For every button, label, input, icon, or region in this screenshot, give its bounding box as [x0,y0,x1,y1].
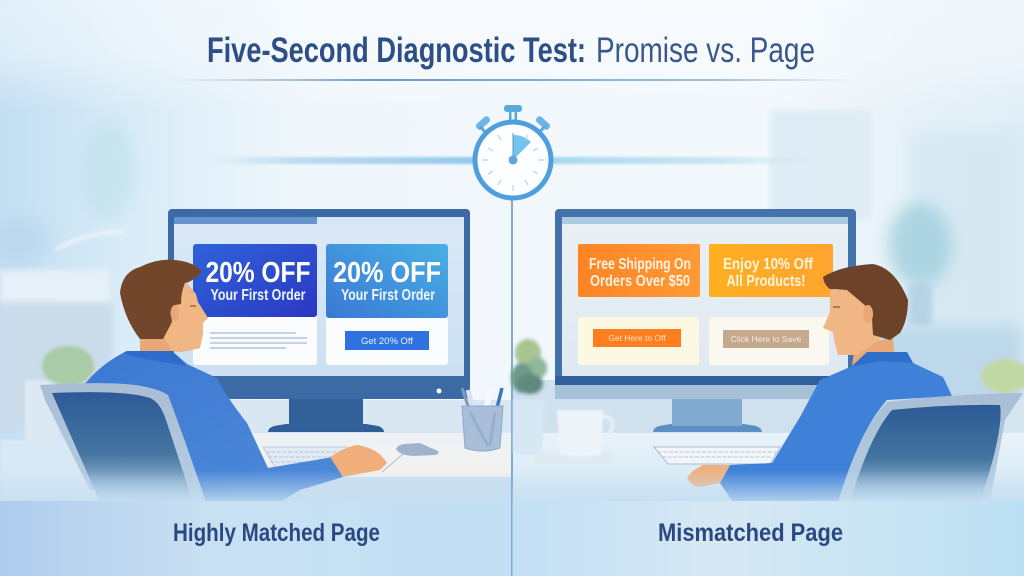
keyboard right [654,447,780,464]
card: free shipping [578,244,700,365]
desk items: pen cup [462,388,503,451]
card: blue offer: 20% OFF [206,257,310,289]
card: 10 percent off [709,244,833,365]
icon: stopwatch [475,105,551,198]
left chair [40,383,206,502]
bottom caption band [0,470,1024,576]
card: 10 percent off: All Products! [726,273,806,290]
hair [120,260,202,339]
neck [852,338,894,366]
title: Promise vs. Page [596,31,815,70]
center line over band [511,470,512,576]
shirt [84,351,343,502]
right person with chair [687,264,1023,502]
button: Get Here to Off [608,333,666,343]
hand [330,445,387,477]
card: light blue offer: Your First Order [341,287,435,304]
left monitor [168,209,470,432]
card: free shipping: Orders Over $50 [590,273,690,290]
left person with chair [40,260,387,502]
caption: Mismatched Page: Mismatched Page [658,519,843,547]
card: blue offer [193,244,317,365]
caption: Highly Matched Page: Highly Matched Page [173,519,380,547]
card: blue offer: Your First Order [210,287,306,304]
card: 10 percent off: Enjoy 10% Off [723,256,814,273]
desk items: mouse [382,443,439,472]
title: Five-Second Diagnostic Test: [207,31,586,70]
left screen [174,217,464,376]
right screen [562,217,848,376]
title underline [172,79,854,81]
shirt [720,352,952,502]
keyboard left [263,447,347,467]
button: Click Here to Save [731,334,801,344]
right monitor [555,209,856,432]
hand [687,465,730,487]
face [160,282,208,351]
hair [823,264,908,340]
center divider line [511,198,513,576]
face [823,290,880,355]
horizontal timeline bar [210,157,812,164]
desk items: left plant pot [511,339,547,454]
neck [140,335,185,352]
card: light blue offer: 20% OFF [333,257,441,289]
button: Get 20% Off [361,336,413,347]
card: free shipping: Free Shipping On [589,256,691,273]
right chair [838,393,1023,502]
card: light blue offer [326,244,448,365]
desk items: coffee mug [535,410,613,464]
